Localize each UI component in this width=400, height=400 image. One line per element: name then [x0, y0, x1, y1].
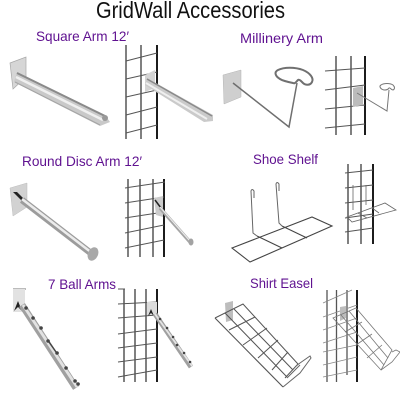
- panel: 7 ball arms: [13, 276, 192, 388]
- icon: square arm on grid: [126, 45, 213, 139]
- label: millinery arm: Millinery Arm: [240, 30, 323, 46]
- icon: shirt easel product: [215, 301, 311, 387]
- icon: shoe shelf product: [232, 182, 332, 262]
- icon: round disc arm on grid: [125, 179, 194, 257]
- panel: shoe shelf: [232, 151, 396, 262]
- icon: round disc arm product: [10, 183, 100, 262]
- icon: square arm product: [10, 57, 110, 126]
- panel: millinery arm: [223, 30, 394, 135]
- label: square arm: Square Arm 12′: [36, 28, 129, 44]
- label: round disc arm: Round Disc Arm 12′: [22, 153, 142, 169]
- icon: 7 ball arm on grid: [118, 289, 192, 382]
- label: 7 ball arms: 7 Ball Arms: [48, 276, 116, 292]
- panel: shirt easel: [215, 275, 400, 387]
- label: shirt easel: Shirt Easel: [250, 275, 313, 291]
- panel: square arm: [10, 28, 213, 139]
- panel: round disc arm: [10, 153, 194, 262]
- icon: millinery arm on grid: [325, 56, 394, 135]
- icon: 7 ball arm product: [13, 289, 78, 388]
- icon: millinery arm product: [223, 68, 313, 127]
- label: shoe shelf: Shoe Shelf: [253, 151, 318, 167]
- icon: shirt easel on grid: [323, 290, 400, 382]
- icon: shoe shelf on grid: [345, 164, 396, 244]
